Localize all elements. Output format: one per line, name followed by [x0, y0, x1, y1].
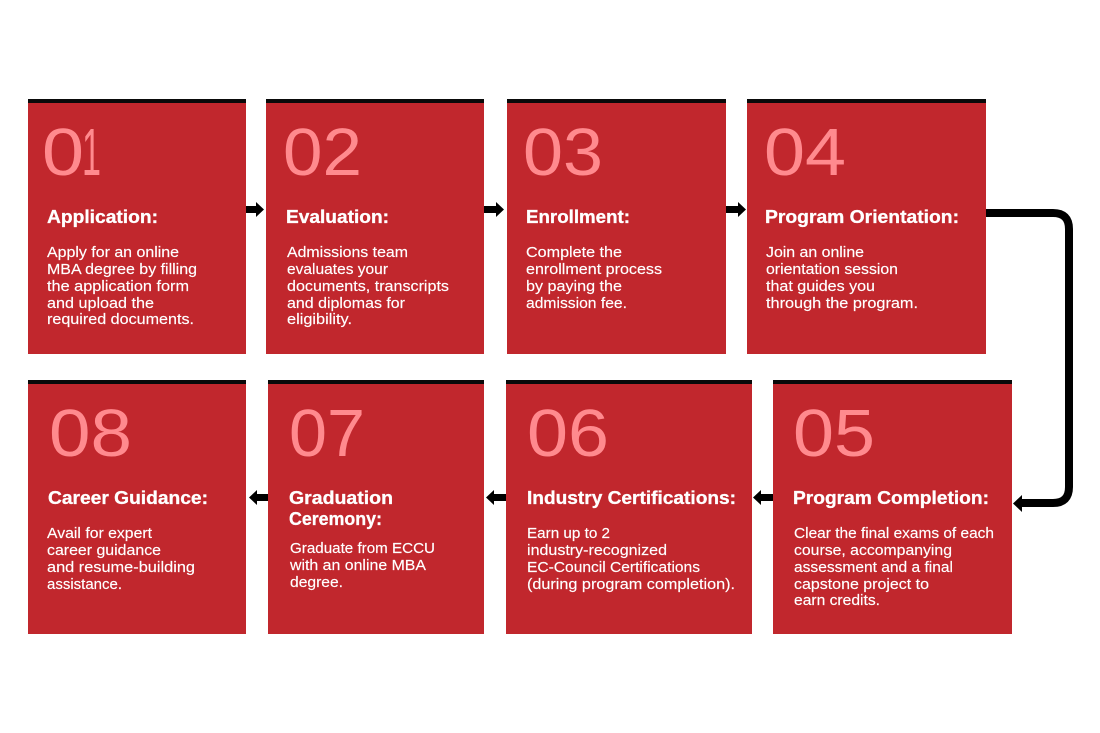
text block: enrollment description: by paying the: [526, 279, 622, 295]
text block: evaluation description: Admissions team: [287, 245, 408, 261]
text block: completion description: [794, 526, 994, 609]
text block: completion description: Clear the final exams of each: [794, 526, 994, 542]
arrow: step 1 to 2: [246, 202, 264, 217]
heading: program orientation: Program Orientation:: [765, 207, 959, 227]
text block: application description: Apply for an online: [47, 245, 179, 261]
arrow: step 7 to 8: [249, 490, 268, 505]
number 02: 02: [283, 115, 362, 190]
text block: evaluation description: evaluates your: [287, 262, 388, 278]
text block: career description: [47, 526, 195, 593]
text block: graduation description: [289, 541, 435, 591]
heading: graduation ceremony: [289, 488, 393, 529]
text block: completion description: earn credits.: [794, 593, 880, 609]
text block: certifications description: Earn up to 2: [527, 526, 610, 542]
text block: orientation description: orientation session: [766, 262, 898, 278]
panel: step 05 program completion: [773, 380, 1012, 634]
text block: certifications description: (during program completion).: [527, 577, 735, 593]
heading: evaluation: Evaluation:: [286, 207, 389, 227]
text block: enrollment description: Complete the: [526, 245, 622, 261]
text block: application description: MBA degree by filling: [47, 262, 197, 278]
text block: enrollment description: admission fee.: [526, 296, 627, 312]
text block: enrollment description: [526, 245, 662, 312]
number 08: 08: [49, 396, 132, 471]
text block: orientation description: [766, 245, 918, 312]
text block: evaluation description: [287, 245, 449, 328]
heading: program completion: Program Completion:: [793, 488, 989, 508]
text block: completion description: assessment and a final: [794, 560, 953, 576]
number 06: 06: [527, 396, 609, 471]
text block: application description: [47, 245, 197, 328]
arrow: step 3 to 4: [726, 202, 746, 217]
heading: industry certifications: Industry Certifications:: [527, 488, 736, 508]
number 05: 05: [793, 396, 875, 471]
arrow: step 4 to 5 connector: [986, 213, 1069, 512]
text block: career description: assistance.: [47, 577, 122, 593]
panel: step 06 industry certifications: [506, 380, 752, 634]
text block: completion description: capstone project to: [794, 577, 929, 593]
text block: orientation description: that guides you: [766, 279, 875, 295]
number 01: 0: [42, 115, 84, 190]
text block: evaluation description: documents, transcripts: [287, 279, 449, 295]
panel: step 04 program orientation: [747, 99, 986, 354]
text block: application description: required documents.: [47, 312, 194, 328]
arrow: step 6 to 7: [486, 490, 506, 505]
heading: career guidance: Career Guidance:: [48, 488, 208, 508]
text block: graduation description: with an online MBA: [289, 558, 426, 574]
text block: career description: career guidance: [47, 543, 161, 559]
text block: evaluation description: and diplomas for: [287, 296, 405, 312]
number 03: 03: [523, 115, 603, 190]
text block: application description: the application form: [47, 279, 189, 295]
text block: orientation description: Join an online: [766, 245, 864, 261]
panel: step 02 evaluation: [266, 99, 484, 354]
arrow: step 2 to 3: [484, 202, 504, 217]
heading: application: Application:: [47, 207, 158, 227]
text block: certifications description: [527, 526, 735, 593]
text block: evaluation description: eligibility.: [287, 312, 352, 328]
text block: certifications description: industry-recognized: [527, 543, 667, 559]
arrow: step 5 to 6: [753, 490, 773, 505]
panel: step 07 graduation ceremony: [268, 380, 484, 634]
panel: step 03 enrollment: [507, 99, 726, 354]
text block: graduation description: Graduate from ECCU: [290, 541, 435, 557]
text block: application description: and upload the: [47, 296, 154, 312]
text block: career description: and resume-building: [47, 560, 195, 576]
heading: graduation ceremony: Ceremony:: [289, 509, 382, 529]
text block: orientation description: through the program.: [766, 296, 918, 312]
text block: career description: Avail for expert: [47, 526, 152, 542]
text block: enrollment description: enrollment process: [526, 262, 662, 278]
panel: step 08 career guidance: [28, 380, 246, 634]
text block: completion description: course, accompanying: [794, 543, 952, 559]
panel: step 01 application: [28, 99, 246, 354]
text block: certifications description: EC-Council Certifications: [527, 560, 700, 576]
heading: graduation ceremony: Graduation: [289, 488, 393, 508]
heading: enrollment: Enrollment:: [526, 207, 630, 227]
text block: graduation description: degree.: [290, 575, 343, 591]
number 07: 07: [289, 396, 365, 471]
number 01: 1: [82, 115, 101, 190]
number 04: 04: [764, 115, 846, 190]
